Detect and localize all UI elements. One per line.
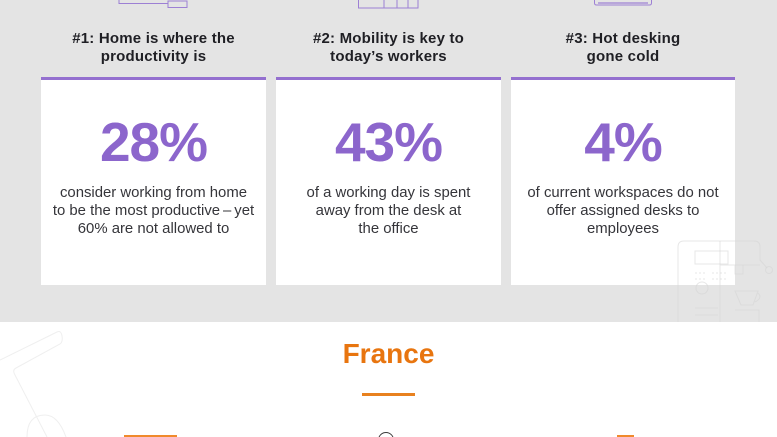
heading: #3: #3: Hot desking <box>566 30 680 47</box>
stat: 28%: 28% <box>100 111 207 173</box>
grey background band <box>0 0 777 322</box>
icon: paint roller watermark <box>0 331 66 437</box>
text: card 3 description: offer assigned desks to <box>547 203 699 219</box>
panel: card 1 <box>41 77 266 285</box>
icon: coffee machine watermark <box>678 240 772 322</box>
heading: #1: productivity is <box>101 48 206 65</box>
heading: #2: today’s workers <box>330 48 447 65</box>
heading: #3 <box>566 30 680 65</box>
icon: orange bar left <box>124 435 177 437</box>
icon: desk with monitor <box>118 0 188 8</box>
divider under France <box>362 393 415 396</box>
text: card 2 description: of a working day is spent <box>307 185 470 201</box>
icon: orange bar right <box>617 435 634 437</box>
heading: #1 <box>72 30 235 65</box>
panel: card 2 <box>276 77 501 285</box>
text: card 1 description: to be the most productive – yet <box>53 203 254 219</box>
panel: card 3 <box>511 77 735 285</box>
text: card 2 description: away from the desk at <box>316 203 461 219</box>
icon: office cabinet <box>358 0 418 8</box>
heading: #2 <box>313 30 464 65</box>
heading: #2: #2: Mobility is key to <box>313 30 464 47</box>
heading: #1: #1: Home is where the <box>72 30 235 47</box>
text: card 2 description: the office <box>358 221 419 237</box>
text: card 1 description: 60% are not allowed to <box>78 221 229 237</box>
icon: laptop base <box>594 0 652 6</box>
heading: #3: gone cold <box>587 48 659 65</box>
text: card 2 description <box>307 185 470 237</box>
text: card 3 description: of current workspaces do not <box>527 185 719 201</box>
text: card 1 description <box>53 185 254 237</box>
icon: circle top centre <box>378 432 394 437</box>
text: card 3 description <box>527 185 719 237</box>
text: card 1 description: consider working from home <box>60 185 247 201</box>
title: France: France <box>343 338 434 369</box>
stat: 4%: 4% <box>584 111 662 173</box>
text: card 3 description: employees <box>587 221 659 237</box>
stat: 43%: 43% <box>335 111 442 173</box>
